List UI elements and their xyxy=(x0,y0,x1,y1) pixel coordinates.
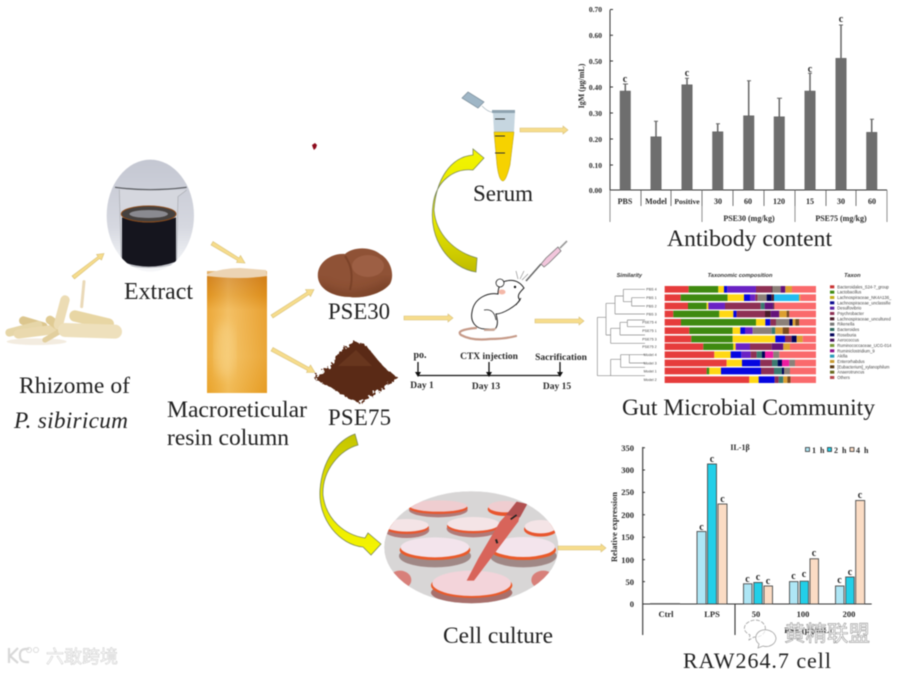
bar chart: antibody content: 60 xyxy=(868,197,876,206)
icon: mouse with syringe xyxy=(460,241,567,340)
taxon legend: Ruminococcaceae_UCG-014 xyxy=(837,343,892,348)
bar chart: RAW264.7 IL-1β expression: PSE (μg/mL) xyxy=(784,625,832,635)
bar chart: antibody content: 30 xyxy=(837,197,845,206)
stacked bars xyxy=(665,289,816,380)
legend headings: Taxonomic composition xyxy=(708,273,773,279)
dendrogram: Model 4 xyxy=(644,353,657,357)
bar chart: RAW264.7 IL-1β expression: Relative expression xyxy=(609,492,619,562)
bar chart: RAW264.7 IL-1β expression: c xyxy=(745,574,750,585)
bar chart: antibody content: 30 xyxy=(714,197,722,206)
bar chart: antibody content: PBS xyxy=(618,197,633,206)
bar chart: antibody content: c xyxy=(808,64,813,75)
taxon legend: Bacteroidales_S24-7_group xyxy=(837,284,890,289)
bar chart: antibody content: IgM (μg/mL) xyxy=(577,63,586,108)
bar chart: antibody content: 0.00 xyxy=(589,186,602,195)
bar chart: antibody content: 15 xyxy=(806,197,814,206)
taxon legend: Lactobacillus xyxy=(837,290,861,295)
bar chart: RAW264.7 IL-1β expression: c xyxy=(766,576,771,587)
bar chart: RAW264.7 IL-1β expression: c xyxy=(837,575,842,586)
taxon legend: Lachnospiraceae_uncultured xyxy=(837,316,891,321)
bar chart: antibody content: 0.70 xyxy=(589,5,602,14)
taxon legend: Ruminiclostridium_9 xyxy=(837,348,875,353)
legend: 4 h xyxy=(856,446,869,455)
arrow: rhizome to extract xyxy=(72,254,104,279)
timeline: Sacrification xyxy=(535,353,588,363)
heading: RAW264.7 cell: RAW264.7 cell xyxy=(683,648,831,673)
bar chart: antibody content: 0.50 xyxy=(589,57,602,66)
dendrogram: PSE75 3 xyxy=(642,337,657,341)
arrow: cell culture to RAW264.7 chart xyxy=(558,544,606,552)
bar chart: antibody content: c xyxy=(623,74,628,85)
label: serum: Serum xyxy=(473,181,533,206)
taxon legend: Enterorhabdus xyxy=(837,359,865,364)
bar chart: RAW264.7 IL-1β expression: 100 xyxy=(621,555,634,565)
watermark: WeChat account name: 黄精联盟 xyxy=(784,617,870,648)
taxon legend: Aerococcus xyxy=(837,338,859,343)
dendrogram: PSE75 2 xyxy=(642,345,657,349)
label: rhizome: Rhizome of xyxy=(19,373,130,399)
dendrogram: Model 3 xyxy=(644,361,657,365)
bar chart: RAW264.7 IL-1β expression: LPS xyxy=(704,609,720,619)
timeline: CTX injection xyxy=(460,352,519,362)
bar chart: RAW264.7 IL-1β expression: 200 xyxy=(843,609,855,619)
watermark: bottom-left logo xyxy=(9,643,118,669)
icon: pipette xyxy=(467,502,527,581)
bar chart: RAW264.7 IL-1β expression: 300 xyxy=(621,465,634,475)
dendrogram: Model 2 xyxy=(644,378,657,382)
arrow: curved PSE75 to cell culture xyxy=(320,434,381,555)
bar chart: antibody content: 0.20 xyxy=(589,135,602,144)
timeline: Day 1 xyxy=(410,381,434,391)
dendrogram: PBS 4 xyxy=(646,288,657,292)
label: cell culture: Cell culture xyxy=(443,623,553,649)
bar chart: RAW264.7 IL-1β expression: c xyxy=(756,572,761,583)
legend headings: Similarity xyxy=(617,273,643,279)
bar chart: RAW264.7 IL-1β expression: c xyxy=(710,454,715,465)
bar chart: RAW264.7 IL-1β expression: 200 xyxy=(621,510,634,520)
bar chart: RAW264.7 IL-1β expression: 150 xyxy=(621,532,634,542)
taxon legend: Desulfovibrio xyxy=(837,306,862,311)
bar chart: RAW264.7 IL-1β expression: 50 xyxy=(752,609,760,619)
bar chart: RAW264.7 IL-1β expression: IL-1β xyxy=(730,443,750,452)
bar chart: antibody content xyxy=(577,5,887,223)
icon: beaker of extract xyxy=(107,160,194,272)
bar chart: antibody content: PSE30 (mg/kg) xyxy=(723,214,775,223)
dendrogram: Model 1 xyxy=(644,369,657,373)
bar chart: RAW264.7 IL-1β expression: 0 xyxy=(630,599,634,609)
bar chart: RAW264.7 IL-1β expression: c xyxy=(791,571,796,582)
label: resin column: Macroreticular xyxy=(167,397,307,423)
label: PSE30: PSE30 xyxy=(328,299,390,324)
bar chart: antibody content: c xyxy=(685,68,690,79)
taxon legend xyxy=(830,284,892,380)
arrow: column to PSE75 xyxy=(271,348,315,372)
label: resin column xyxy=(167,397,307,451)
bar chart: antibody content: 120 xyxy=(773,197,785,206)
bar chart: RAW264.7 IL-1β expression: 250 xyxy=(621,487,634,497)
icon: PSE75 powder xyxy=(314,341,399,403)
label: rhizome xyxy=(13,373,130,434)
bar chart: RAW264.7 IL-1β expression: 100 xyxy=(797,609,809,619)
legend: 2 h xyxy=(834,446,847,455)
bar chart: RAW264.7 IL-1β expression: c xyxy=(802,569,807,580)
watermark: bottom-left logo: 六敢跨境 xyxy=(46,643,118,669)
legend headings: Taxon xyxy=(844,273,861,279)
bar chart: antibody content: c xyxy=(839,14,844,25)
bar chart: antibody content: PSE75 (mg/kg) xyxy=(815,214,867,223)
bar chart: antibody content: 60 xyxy=(744,197,752,206)
legend headings xyxy=(617,273,861,279)
dendrogram xyxy=(597,288,657,382)
timeline: Day 15 xyxy=(543,382,571,392)
timeline: po. xyxy=(413,350,427,361)
label: rhizome: P. sibiricum xyxy=(13,408,128,434)
bar chart: antibody content: 0.40 xyxy=(589,83,602,92)
bar chart: antibody content: 0.60 xyxy=(589,31,602,40)
arrow: serum to antibody chart xyxy=(520,126,568,134)
bar chart: RAW264.7 IL-1β expression: 350 xyxy=(621,443,634,453)
watermark: WeChat account name xyxy=(744,617,870,648)
dendrogram: PSE75 1 xyxy=(642,329,657,333)
bar chart: antibody content: Model xyxy=(645,197,668,206)
arrow: mouse to gut community xyxy=(535,317,584,325)
heading: antibody content: Antibody content xyxy=(667,226,832,252)
bar chart: antibody content: Positive xyxy=(674,197,700,206)
bar chart: RAW264.7 IL-1β expression xyxy=(609,443,872,635)
dendrogram: PBS 3 xyxy=(646,312,657,316)
arrow: PSE30 to mouse xyxy=(404,314,453,322)
arrow: curved mouse to serum xyxy=(432,149,484,272)
dendrogram: PBS 2 xyxy=(646,304,657,308)
label: resin column: resin column xyxy=(167,425,289,451)
legend: 1 h xyxy=(812,446,825,455)
dendrogram: PSE75 4 xyxy=(642,321,657,325)
taxon legend: [Eubacterium]_xylanophilum xyxy=(837,364,890,369)
taxon legend: Others xyxy=(837,375,850,380)
bar chart: RAW264.7 IL-1β expression: Ctrl xyxy=(658,609,674,619)
bar chart: RAW264.7 IL-1β expression: c xyxy=(699,522,704,533)
timeline xyxy=(410,350,588,392)
legend xyxy=(806,446,869,455)
bar chart: RAW264.7 IL-1β expression: c xyxy=(812,548,817,559)
arrow: column to PSE30 xyxy=(271,290,314,318)
taxon legend: Akifia xyxy=(837,354,848,359)
bar chart: RAW264.7 IL-1β expression: 50 xyxy=(626,577,634,587)
icon: cell culture dishes xyxy=(383,490,560,605)
dendrogram: PBS 1 xyxy=(646,296,657,300)
label: PSE75: PSE75 xyxy=(328,405,391,430)
chart: gut microbial community xyxy=(597,273,892,382)
timeline: Day 13 xyxy=(472,382,500,392)
bar chart: RAW264.7 IL-1β expression: c xyxy=(848,567,853,578)
icon: PSE30 powder xyxy=(318,248,392,300)
bar chart: antibody content: 0.10 xyxy=(589,161,602,170)
heading: gut microbial community: Gut Microbial Community xyxy=(622,395,875,421)
taxon legend: Psychrobacter xyxy=(837,311,864,316)
taxon legend: Rikenella xyxy=(837,322,855,327)
icon: small red speck xyxy=(312,143,317,150)
taxon legend: Roseburia xyxy=(837,332,857,337)
icon: syringe xyxy=(526,241,567,281)
arrow: extract to column xyxy=(211,242,245,263)
taxon legend: Anaerotruncus xyxy=(837,370,864,375)
taxon legend: Lachnospiraceae_unclassifie xyxy=(837,300,891,305)
label: extract: Extract xyxy=(124,279,193,305)
bar chart: RAW264.7 IL-1β expression: c xyxy=(720,494,725,505)
bar chart: antibody content: 0.30 xyxy=(589,109,602,118)
icon: rhizome of P. sibiricum xyxy=(7,282,115,345)
bar chart: RAW264.7 IL-1β expression: c xyxy=(858,490,863,501)
icon: serum tube xyxy=(462,92,515,181)
taxon legend: Lachnospiraceae_NK4A136_ xyxy=(837,295,892,300)
taxon legend: Bacteroides xyxy=(837,327,859,332)
icon: macroreticular resin column xyxy=(207,268,267,393)
